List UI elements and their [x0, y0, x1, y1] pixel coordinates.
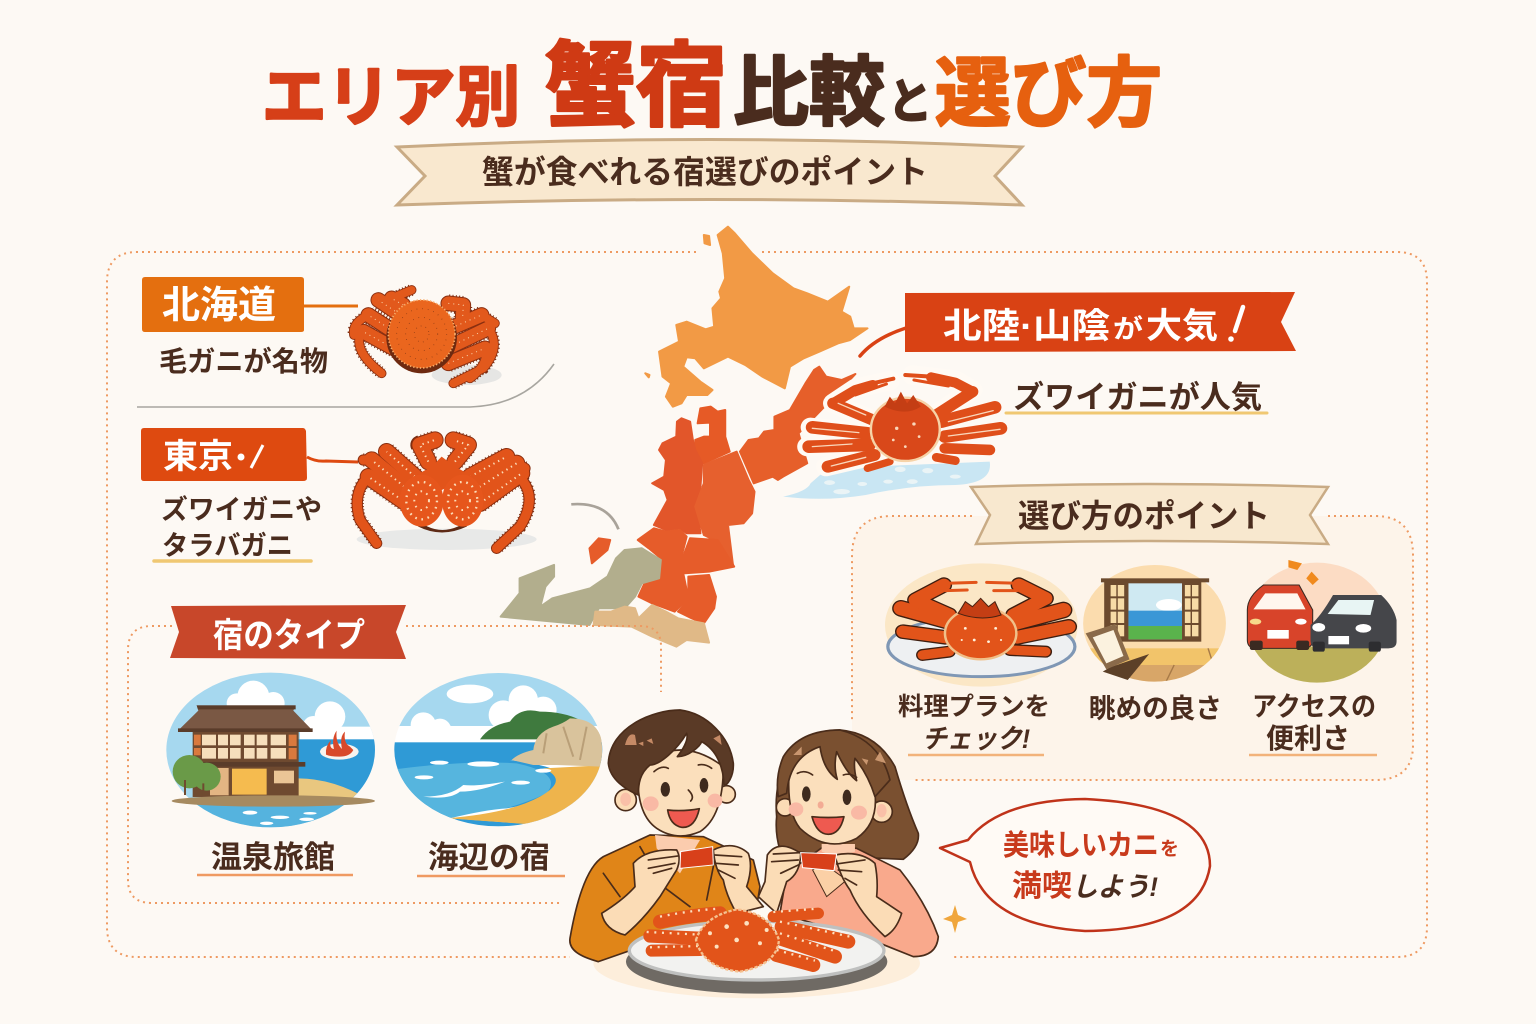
banner: 北陸・山陰が大気: 大気 — [1146, 307, 1218, 346]
banner: 北陸・山陰が大気 — [860, 292, 1296, 356]
map: Aomori area — [695, 407, 730, 463]
gray arc — [571, 504, 618, 529]
label: チェック: チェック! — [922, 724, 1030, 754]
ribbon: 宿のタイプ: 宿のタイプ — [213, 617, 365, 655]
tag: 東京 — [141, 428, 358, 481]
map: central south — [638, 528, 687, 612]
callout: speech bubble: しよう! — [1072, 872, 1158, 902]
title: 選び方 — [935, 52, 1162, 137]
ribbon: 選び方のポイント — [971, 484, 1328, 544]
woman — [758, 730, 938, 957]
map: Chugoku — [501, 548, 661, 625]
callout: speech bubble: を — [1160, 838, 1179, 860]
map: Hokkaido — [645, 227, 867, 407]
banner: 北陸・山陰が大気: が — [1113, 314, 1143, 344]
tag: 北海道: 北海道 — [162, 285, 276, 327]
tag: 東京: 東京 — [163, 438, 233, 476]
panel: Hokuriku San'in — [783, 292, 1296, 499]
map: Shikoku — [594, 605, 709, 647]
callout: speech bubble — [940, 799, 1210, 931]
title: と — [888, 76, 932, 129]
title: 蟹宿 — [545, 36, 727, 138]
ribbon: 選び方のポイント: 選び方のポイント — [1018, 498, 1270, 534]
icon: king crab — [357, 440, 537, 550]
onsen symbol — [320, 731, 359, 760]
map: Tokai — [678, 575, 716, 623]
plate of crab — [626, 909, 887, 994]
callout: speech bubble: 満喫 — [1012, 870, 1072, 903]
title: 比較 — [733, 51, 885, 136]
map: central east — [695, 452, 754, 567]
text: ズワイガニや: ズワイガニや — [161, 494, 322, 525]
outer dotted frame — [107, 252, 1427, 957]
map: Honshu east — [740, 367, 855, 483]
callout: speech bubble: 美味しいカニ — [1003, 829, 1159, 862]
label: アクセスの: アクセスの — [1252, 692, 1376, 722]
icon: window view — [1081, 563, 1228, 685]
underline — [1249, 754, 1377, 756]
text: 毛ガニが名物: 毛ガニが名物 — [159, 345, 328, 377]
map: west Tohoku — [652, 418, 702, 533]
title — [262, 36, 1162, 138]
icon: hairy crab — [354, 290, 502, 385]
panel: stay types — [128, 605, 661, 903]
panel: Hokkaido — [137, 277, 554, 407]
text: タラバガニ: タラバガニ — [162, 531, 293, 561]
panel: choosing points — [852, 484, 1413, 780]
icon: ryokan — [163, 670, 380, 833]
map: Kanto — [680, 538, 734, 573]
underline — [908, 754, 1044, 756]
map: Sado island — [590, 538, 610, 563]
map of Japan — [501, 227, 867, 647]
icon: seaside — [390, 670, 610, 830]
subtitle ribbon — [397, 140, 1022, 205]
man — [570, 710, 763, 962]
divider curve — [137, 364, 554, 407]
label: 便利さ: 便利さ — [1266, 723, 1350, 754]
label: 眺めの良さ: 眺めの良さ — [1089, 694, 1222, 724]
text: ズワイガニが人気: ズワイガニが人気 — [1013, 380, 1262, 415]
subtitle ribbon: 蟹が食べれる宿選びのポイント — [482, 154, 928, 190]
ribbon: 宿のタイプ — [170, 605, 406, 659]
tag: 北海道 — [142, 277, 358, 332]
label: 海辺の宿: 海辺の宿 — [428, 840, 550, 875]
icon: sparkle — [943, 905, 967, 933]
soft ground — [593, 928, 920, 998]
couple eating crab — [570, 710, 938, 998]
banner: 北陸・山陰が大気: 北陸·山陰 — [943, 307, 1110, 346]
label: 料理プランを: 料理プランを — [898, 693, 1050, 721]
icon: cars — [1246, 560, 1397, 687]
underline — [154, 559, 311, 563]
icon: snow crab on water — [783, 375, 1001, 499]
icon: crab on plate — [885, 563, 1078, 687]
label: 温泉旅館: 温泉旅館 — [211, 840, 335, 875]
title: エリア別 — [262, 60, 520, 134]
underline — [1006, 412, 1267, 414]
panel: Tokyo — [141, 428, 537, 561]
